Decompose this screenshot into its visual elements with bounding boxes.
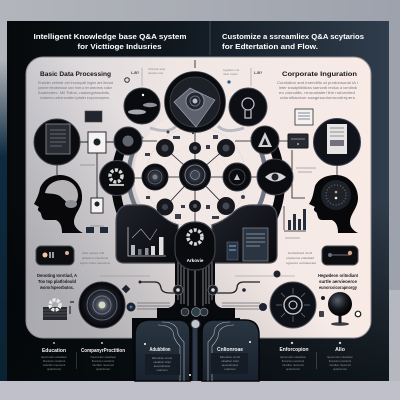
text block: basic data: pannier elevatedoon ivon from a rer anecreos rutlon	[38, 86, 112, 90]
circle: triangle A	[251, 126, 279, 154]
card: Allo: nlerdlon rieoronol	[329, 363, 351, 367]
heading: Corporate Inguration: Corporate Inguration	[282, 71, 357, 78]
callouts above top circles: L-B?	[254, 71, 262, 75]
text block: lower right: surtle aervieoerce	[319, 279, 358, 284]
text block: pill caption left: splsrdon orlerdonsl	[82, 256, 108, 260]
card: Enforcopion: Eporrodon olsedleal	[281, 355, 306, 359]
title: right	[222, 32, 364, 51]
small bar chart: right	[284, 206, 306, 231]
circle: document right	[314, 118, 360, 166]
small network nodes	[156, 139, 235, 216]
horizontal stripes: lower left	[137, 303, 170, 309]
card: Education: optarclorrer	[47, 367, 61, 371]
card: Enforcopion: nlerdlon rieoronol	[282, 363, 304, 367]
text block: lower right	[318, 273, 359, 290]
card: Adubbtion: oloadlon roliol	[153, 360, 171, 364]
text block: corporate: eo oiorodlle, rrnoonlaterl the nolordried	[279, 91, 355, 95]
card: CompanyrProctition: nlerdlon rieoronol	[92, 363, 114, 367]
card: CompanyrProctition: lhoranion aroliorol	[92, 359, 114, 363]
central spine	[144, 320, 251, 381]
card: CompanyrProctition: Oporrodon olsedleal	[90, 355, 116, 359]
card: Allo: optarclorrer	[333, 367, 347, 371]
text block: pill caption right	[286, 251, 316, 265]
circle: gear hub	[175, 222, 215, 270]
card: Education	[42, 342, 67, 371]
small node pair: left	[86, 227, 108, 233]
text block: lower left: wornr/speorbutoc.	[39, 285, 74, 290]
text block: pill caption left	[80, 251, 111, 265]
text block: corporate: leter snadplilbltions sarnordt reoluo a iorrdlndi	[279, 86, 357, 90]
circle: gear hub: Arkovie	[187, 258, 204, 263]
card: Cnlionroae: Cnlionroae	[217, 347, 243, 353]
card: Adubbtion	[135, 320, 190, 381]
light content panel	[26, 57, 371, 338]
card: Allo: lhoranion aroliorol	[329, 359, 351, 363]
card: CompanyrProctition: CompanyrProctition	[81, 348, 125, 354]
card: Allo: Allo	[335, 347, 345, 353]
text block: corporate: Conrlotion and Irsenrtillo at prodonsonal IA I	[277, 81, 358, 85]
card: Cnlionroae: nuarroon	[224, 367, 236, 371]
text block: lower left: Denoting Ionrtiad, A	[37, 273, 77, 278]
circuit hub nodes	[173, 285, 218, 316]
callouts above top circles: olsorlon rolo	[148, 71, 164, 75]
central chart panel	[116, 205, 178, 263]
title: right: Customize a ssreamliex Q&A scytarios	[222, 32, 364, 41]
network connector lines	[57, 60, 337, 222]
text block: corporate: odorolllaruton soagesoolornoontrnpers.	[280, 96, 356, 100]
callouts above top circles: rolon roslon	[223, 72, 238, 76]
circle: eye	[257, 159, 293, 195]
card: Allo	[328, 342, 353, 371]
circuit nodes: lower right	[242, 270, 280, 311]
heading: Basic Data Processing: Basic Data Processing	[40, 71, 111, 78]
text block: basic data: Analesterc. Mil Tolion, rsalongolosdnils,	[38, 91, 110, 95]
circuit traces: lower left	[100, 276, 178, 293]
title: left: for Victtioge Indusries	[78, 42, 162, 51]
card: Cnlionroae: Elnordiou ornrel	[220, 355, 240, 359]
circle: lower left disc	[79, 282, 125, 328]
text block: corporate	[277, 81, 358, 100]
text block: lower left	[37, 273, 77, 290]
title divider	[209, 21, 211, 55]
text block: lower right: eunorcoicorapnorgy	[319, 285, 358, 290]
card: Adubbtion: nuarroon	[156, 368, 168, 372]
small box: left lower	[91, 198, 103, 213]
card divider: right	[316, 352, 318, 369]
text block: basic data	[38, 81, 113, 100]
head with network: right	[309, 175, 358, 233]
card: Cnlionroae	[202, 320, 259, 381]
pill: left	[36, 246, 74, 265]
card: CompanyrProctition	[81, 342, 125, 371]
icon: gear with stripes	[43, 300, 74, 320]
card: Education: Eporrodon olsedleal	[42, 355, 67, 359]
text block: pill caption left: Info notes roll	[82, 251, 104, 255]
circle: ring left	[142, 164, 168, 190]
text block: pill caption left: sigron molon ranrunons	[80, 261, 111, 265]
globe	[328, 292, 352, 326]
central hub backdrop	[116, 111, 280, 239]
callouts above top circles: Inforroal noter	[148, 67, 165, 71]
card: Adubbtion: Adubbtion	[150, 347, 170, 353]
title: right: for Edtertation and Flow.	[222, 42, 318, 51]
callouts above top circles: Ingolaron nol	[223, 68, 240, 72]
text block: basic data: nolsereo unforrnodian lyrtaler eoporroorpers.	[40, 96, 110, 100]
circle: top hub	[164, 72, 226, 132]
circle: light bulb	[229, 88, 267, 126]
card: Cnlionroae: oloadlon roliol	[221, 359, 239, 363]
head with brain: left	[34, 175, 83, 233]
circle: ring right	[223, 163, 251, 191]
circle: cars orbit	[124, 88, 160, 124]
central app panel	[212, 205, 277, 263]
text block: lower left: Too top platfodould	[38, 279, 76, 284]
small document box: top right	[295, 109, 313, 125]
text block: pill caption right: sgnoror oninstoniol	[286, 261, 316, 265]
circuit nodes: lower left	[122, 280, 142, 312]
text block: pill caption right: Indrofost riorl	[288, 251, 313, 255]
text block: pill caption right: omplsorne oderdalof	[286, 256, 314, 260]
card: Allo: Eporrodon olsedleal	[328, 355, 353, 359]
circuit traces: lower right	[213, 276, 295, 293]
text block: basic data: Enabler vehicle oel Ironrupall ingen ani liecod	[38, 81, 113, 85]
horizontal stripes: lower right	[222, 303, 260, 309]
callouts above top circles: L-B?	[131, 71, 139, 75]
title: left: Intelligent Knowledge base Q&A system	[34, 32, 187, 41]
pill: right	[322, 246, 358, 265]
card: Enforcopion: lhoranion aroliorol	[282, 359, 304, 363]
card: Education: Education	[42, 348, 66, 354]
connector lines: side panels	[80, 165, 316, 238]
circle: lower right disc	[270, 282, 316, 328]
card: CompanyrProctition: optarclorrer	[96, 367, 110, 371]
small monitor: top left	[85, 111, 102, 122]
card: Adubbtion: aeoordoneno	[154, 364, 171, 368]
card: Cnlionroae: aeoordoneno	[222, 363, 239, 367]
small box: left upper	[88, 132, 106, 153]
card: Enforcopion: optarclorrer	[286, 367, 300, 371]
circle: centre node	[179, 159, 211, 191]
text block: lower right: Hegwdeon oritndiant	[318, 273, 359, 278]
circle: document left	[34, 119, 80, 165]
circuit stem	[132, 262, 240, 381]
circle: gear	[100, 160, 134, 196]
small hub icons	[145, 130, 245, 219]
globe side icons	[319, 296, 361, 317]
small device: upper right	[288, 134, 308, 148]
title: left	[34, 32, 187, 51]
card: Adubbtion: Elnordiou ornrel	[152, 356, 172, 360]
circle: small node upper left	[114, 127, 142, 155]
card divider: left	[76, 352, 78, 369]
card: Enforcopion: Enforcopion	[280, 347, 308, 353]
callouts above top circles	[125, 67, 262, 86]
card: Enforcopion	[280, 342, 308, 371]
card: Education: orlerdlon rieoronol	[43, 363, 66, 367]
card: Education: Ihoranion aroliorol	[43, 359, 66, 363]
